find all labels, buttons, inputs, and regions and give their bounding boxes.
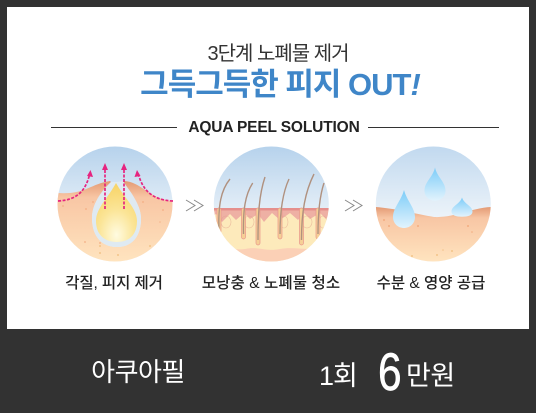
treatment name: 아쿠아필 xyxy=(91,357,185,387)
price figure: 6 xyxy=(378,343,402,402)
price xyxy=(319,343,455,402)
caption 2: 모낭충 & 노폐물 청소 xyxy=(202,275,340,292)
water drops xyxy=(393,168,472,228)
icon: hair follicle circle xyxy=(213,146,330,262)
hairs xyxy=(219,174,324,240)
icon: pore sebum removal circle xyxy=(57,146,173,262)
pore cavity xyxy=(92,181,141,247)
chevrons xyxy=(186,200,362,211)
follicles xyxy=(217,208,320,245)
white panel xyxy=(7,7,529,329)
price count: 1회 xyxy=(319,361,357,391)
skin speckles xyxy=(62,201,164,244)
arrows: sebum rising out xyxy=(58,168,173,209)
sebum xyxy=(96,183,137,242)
caption 3: 수분 & 영양 공급 xyxy=(377,275,485,292)
main heading: 그득그득한 피지 OUT! xyxy=(140,67,420,102)
illustrations xyxy=(58,146,491,262)
price unit: 만원 xyxy=(406,361,455,391)
subtitle: 3단계 노폐물 제거 xyxy=(207,43,349,65)
icon: hydration circle xyxy=(375,146,492,262)
section heading with rules: AQUA PEEL SOLUTION xyxy=(188,119,360,136)
caption 1: 각질, 피지 제거 xyxy=(65,275,163,292)
